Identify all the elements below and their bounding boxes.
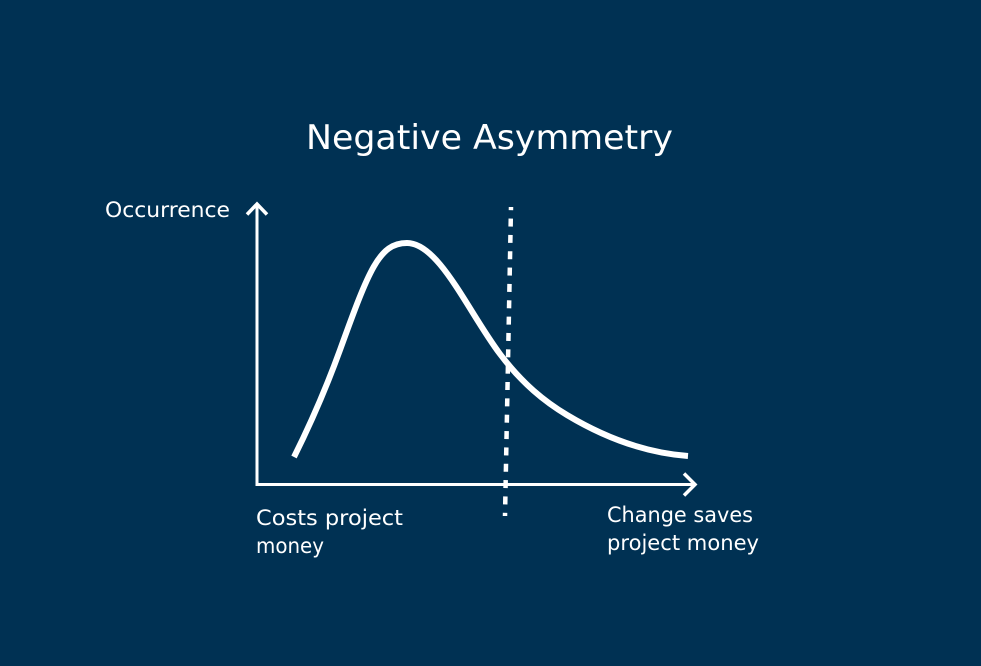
right x-axis label: Change saves (607, 503, 753, 527)
chart axes (247, 204, 695, 496)
left x-axis label: Costs project (256, 506, 403, 530)
left x-axis label (256, 506, 403, 558)
y-axis label: Occurrence (105, 198, 230, 222)
left x-axis label: money (256, 534, 324, 558)
title: Negative Asymmetry (306, 118, 673, 158)
distribution curve (294, 243, 688, 457)
dashed threshold line (505, 207, 511, 516)
right x-axis label (607, 503, 759, 555)
right x-axis label: project money (607, 531, 759, 555)
